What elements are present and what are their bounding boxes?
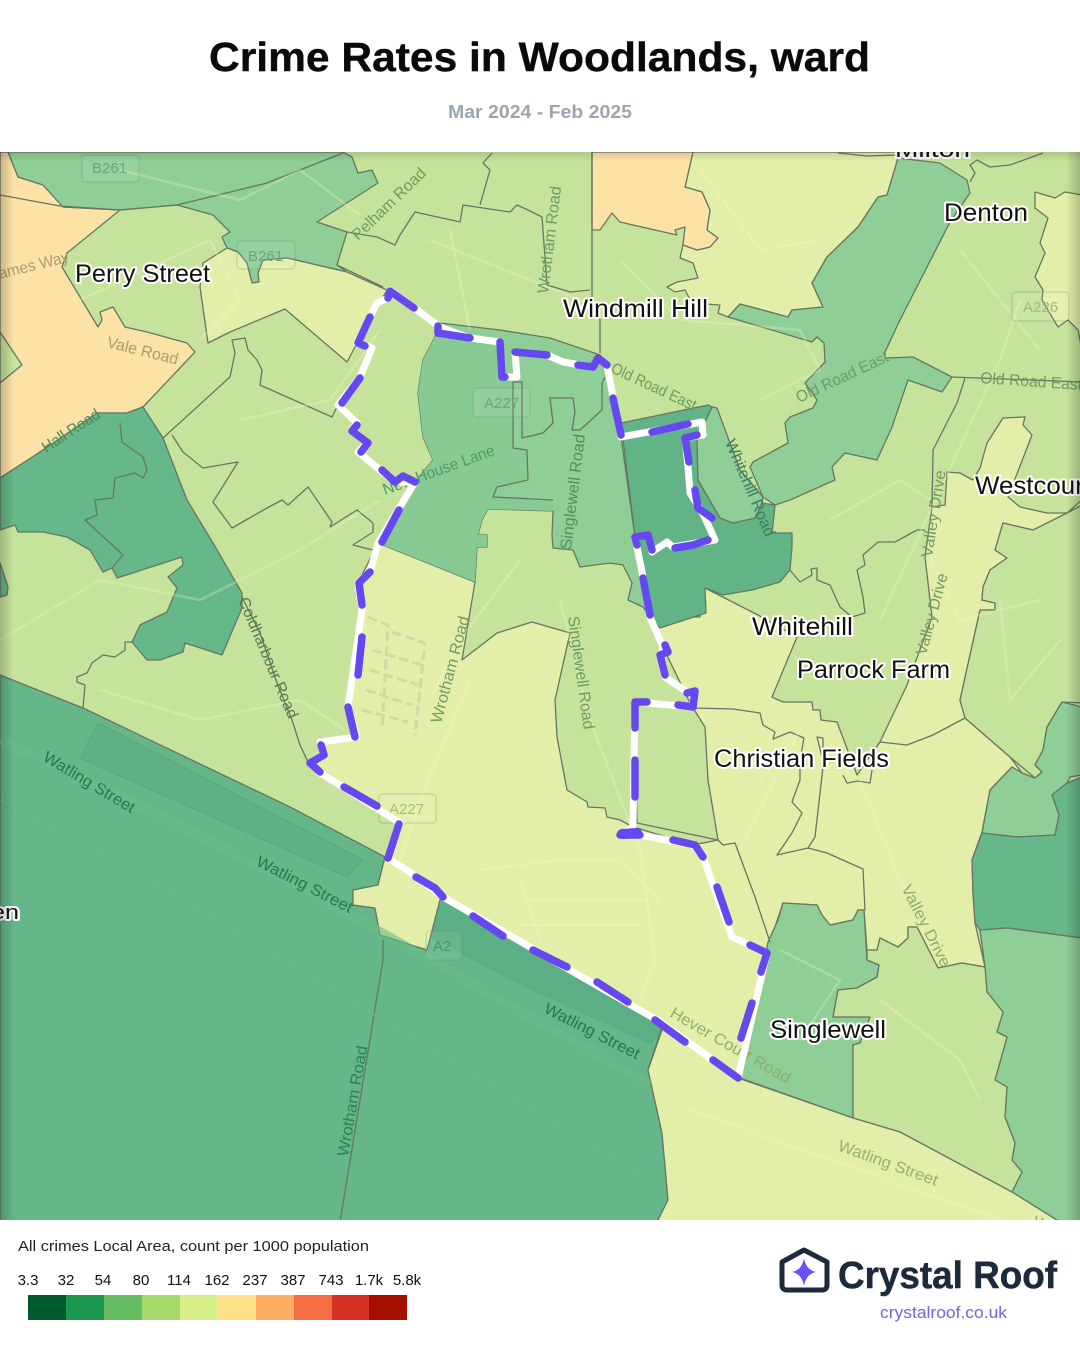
place labels xyxy=(0,137,1080,1044)
legend scale labels: 54 xyxy=(95,1272,111,1289)
region: pale yellow north xyxy=(667,152,898,317)
region: pale yellow ward interior xyxy=(310,543,767,1078)
road labels: Old Road East xyxy=(794,349,892,407)
region: mid green south-east xyxy=(980,928,1080,1222)
road labels: Valley Drive xyxy=(897,882,953,970)
map edge shading xyxy=(0,152,1080,1220)
road labels: Singlewell Road xyxy=(564,615,597,730)
legend xyxy=(18,1238,422,1320)
legend title: All crimes Local Area, count per 1000 population xyxy=(18,1238,369,1255)
shield: B261 Perry Street: B261 xyxy=(248,248,283,265)
road labels: Watling Street xyxy=(40,749,138,817)
legend scale labels: 743 xyxy=(318,1272,344,1289)
ward outline purple dashes xyxy=(310,291,767,1078)
logo wordmark: Crystal Roof xyxy=(838,1255,1057,1297)
place labels: Perry Street xyxy=(75,260,210,288)
road labels: Vale Road xyxy=(105,334,180,369)
region: pale yellow south xyxy=(648,1020,1060,1222)
road labels: Watling Street xyxy=(253,853,356,917)
shield: A226: A226 xyxy=(1023,299,1058,316)
legend scale labels: 1.7k xyxy=(355,1272,384,1289)
ward boundary: white under-line and purple dashes xyxy=(310,290,767,1078)
shield: A227 south: A227 xyxy=(389,801,424,818)
place labels: Whitehill xyxy=(752,613,853,641)
road labels: Wrotham Road xyxy=(535,185,565,294)
place labels: Parrock Farm xyxy=(797,656,950,684)
region: pale yellow east xyxy=(650,417,1080,968)
legend scale labels: 387 xyxy=(280,1272,306,1289)
road labels: Hall Road xyxy=(39,406,104,456)
region: pale yellow pocket at A2 xyxy=(353,857,443,950)
road labels: Wrotham Road xyxy=(428,614,473,725)
region: mid green east xyxy=(982,702,1080,837)
ward outline white xyxy=(310,290,767,1078)
road labels: New House Lane xyxy=(381,442,497,499)
region: mid green Singlewell xyxy=(740,903,879,1118)
road labels: Old Road East xyxy=(608,360,699,415)
legend colour bar xyxy=(28,1295,407,1320)
boundary lines xyxy=(0,152,1080,1222)
shield: A227 south xyxy=(379,794,436,823)
road labels: Valley Drive xyxy=(913,571,952,657)
title: Crime Rates in Woodlands, ward xyxy=(209,34,870,80)
road labels: Pelham Road xyxy=(349,165,430,244)
road labels: Whitehill Road xyxy=(721,437,778,539)
road labels: Wrotham Road xyxy=(335,1044,371,1158)
legend scale labels: 5.8k xyxy=(393,1272,422,1289)
shield: A226 xyxy=(1012,292,1069,321)
shield: B261 north: B261 xyxy=(92,160,127,177)
road labels: Hever Court Road xyxy=(667,1005,793,1087)
region: woodland patch xyxy=(80,723,363,877)
road labels: Watling Street xyxy=(836,1138,941,1190)
legend scale labels xyxy=(18,1272,422,1289)
place labels: Christian Fields xyxy=(714,745,889,773)
shield: B261 Perry Street xyxy=(237,241,295,269)
region: light green east strip xyxy=(960,505,1080,778)
shield: B261 north xyxy=(82,155,139,182)
region: mid green north-east corridor xyxy=(728,158,970,505)
place labels: Milton xyxy=(895,137,970,162)
region: pale yellow north-west xyxy=(200,248,387,362)
region: mid green centre xyxy=(378,323,650,617)
region: pale yellow north-east corner xyxy=(1035,192,1080,350)
A2 and rail corridor xyxy=(0,738,652,1084)
region: peach north xyxy=(592,152,718,250)
place labels: Denton xyxy=(944,199,1028,227)
region: mid green north-west xyxy=(8,152,378,283)
icon: house with star xyxy=(782,1250,827,1290)
region: dark green centre-east xyxy=(621,405,792,628)
legend scale labels: 80 xyxy=(133,1272,149,1289)
place labels: Windmill Hill xyxy=(563,295,708,323)
legend scale labels: 3.3 xyxy=(18,1272,38,1289)
place labels: Singlewell xyxy=(770,1016,886,1044)
shield: A227 north xyxy=(473,388,530,417)
region: darker strip along A2 xyxy=(425,900,662,1045)
shield: A227 north: A227 xyxy=(484,395,519,412)
road labels: Coldharbour Road xyxy=(234,595,301,721)
road labels: Valley Drive xyxy=(919,469,950,559)
legend scale labels: 32 xyxy=(58,1272,74,1289)
legend scale labels: 237 xyxy=(242,1272,268,1289)
logo url: crystalroof.co.uk xyxy=(880,1303,1008,1322)
region: light green south-east xyxy=(833,927,1022,1192)
legend scale labels: 162 xyxy=(204,1272,230,1289)
region: small dark green west edge xyxy=(0,563,8,597)
estate paths xyxy=(362,617,425,735)
subtitle: date range: Mar 2024 - Feb 2025 xyxy=(448,102,632,122)
road labels: Singlewell Road xyxy=(558,433,589,550)
region: slightly darker green centre-west xyxy=(378,337,553,582)
region: mid green Whitehill Road sliver xyxy=(697,407,763,523)
region: small green west edge xyxy=(0,332,22,383)
region: dark green west xyxy=(0,407,242,660)
road labels: Watling Street xyxy=(541,1000,643,1063)
road labels xyxy=(0,165,1080,1235)
minor street network xyxy=(0,168,1060,1100)
road labels: W xyxy=(1031,1214,1051,1235)
shield: A2: A2 xyxy=(433,938,451,955)
region: dark green east xyxy=(972,777,1080,938)
shield: A2 xyxy=(426,931,462,960)
region: peach north-west xyxy=(0,152,195,478)
region: dark green south-west xyxy=(0,675,668,1222)
region: light green inside ward east xyxy=(635,702,718,840)
legend scale labels: 114 xyxy=(167,1272,191,1289)
logo: Crystal Roof xyxy=(782,1250,1057,1322)
